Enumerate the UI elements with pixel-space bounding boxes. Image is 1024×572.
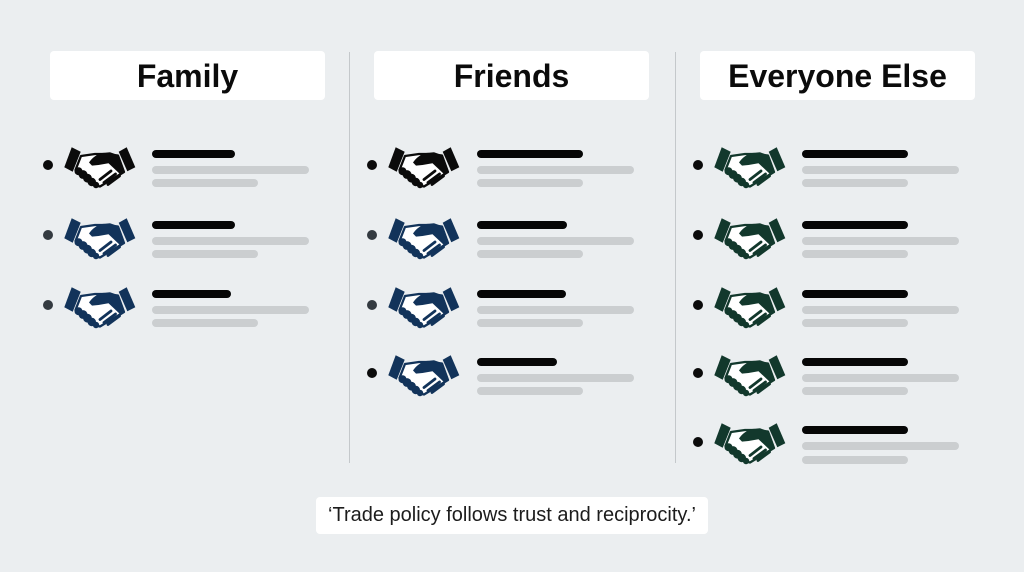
list item 1 xyxy=(367,147,634,188)
title bar xyxy=(152,221,235,229)
description line 1 xyxy=(152,166,309,174)
description line 1 xyxy=(477,374,634,382)
heading: Family: Family xyxy=(137,58,238,94)
description line 2 xyxy=(802,456,908,464)
description line 1 xyxy=(477,166,634,174)
callout: quote xyxy=(316,497,708,534)
heading: Family xyxy=(50,51,325,100)
icon: handshake xyxy=(64,147,136,188)
description line 1 xyxy=(802,306,959,314)
panel: Family xyxy=(43,51,325,328)
description line 2 xyxy=(802,179,908,187)
description line 2 xyxy=(477,250,583,258)
title bar xyxy=(802,358,908,366)
description line 2 xyxy=(152,250,258,258)
list item 5 xyxy=(693,423,959,464)
description line 2 xyxy=(477,179,583,187)
icon: handshake xyxy=(714,355,786,396)
icon: handshake xyxy=(388,218,460,260)
list item 2 xyxy=(693,218,959,260)
callout: quote: ‘Trade policy follows trust and reciprocity.’ xyxy=(328,504,696,526)
description line 2 xyxy=(802,319,908,327)
list item 2 xyxy=(43,218,309,260)
icon: handshake xyxy=(388,147,460,188)
list item 4 xyxy=(693,355,959,396)
bullet xyxy=(693,437,703,447)
title bar xyxy=(802,290,908,298)
icon: handshake xyxy=(64,218,136,260)
bullet xyxy=(693,230,703,240)
icon: handshake xyxy=(714,147,786,188)
bullet xyxy=(367,300,377,310)
list item 3 xyxy=(367,287,634,328)
description line 1 xyxy=(477,306,634,314)
icon: handshake xyxy=(714,423,786,464)
title bar xyxy=(477,221,567,229)
title bar xyxy=(477,290,566,298)
bullet xyxy=(43,300,53,310)
bullet xyxy=(693,368,703,378)
title bar xyxy=(802,221,908,229)
bullet xyxy=(367,368,377,378)
bullet xyxy=(693,160,703,170)
heading: Everyone Else xyxy=(700,51,975,100)
description line 1 xyxy=(802,374,959,382)
bullet xyxy=(367,160,377,170)
bullet xyxy=(693,300,703,310)
icon: handshake xyxy=(388,287,460,328)
title bar xyxy=(802,150,908,158)
description line 1 xyxy=(802,237,959,245)
bullet xyxy=(367,230,377,240)
bullet xyxy=(43,230,53,240)
description line 2 xyxy=(802,250,908,258)
description line 2 xyxy=(477,387,583,395)
list item 3 xyxy=(43,287,309,328)
bullet xyxy=(43,160,53,170)
list item 2 xyxy=(367,218,634,260)
heading: Friends xyxy=(374,51,649,100)
panel: Everyone Else xyxy=(693,51,975,464)
list item 4 xyxy=(367,355,634,396)
description line 1 xyxy=(802,166,959,174)
list item 3 xyxy=(693,287,959,328)
title bar xyxy=(477,150,583,158)
title bar xyxy=(152,290,231,298)
heading: Everyone Else: Everyone Else xyxy=(728,58,947,94)
title bar xyxy=(477,358,557,366)
description line 1 xyxy=(152,306,309,314)
icon: handshake xyxy=(64,287,136,328)
heading: Friends: Friends xyxy=(454,58,569,94)
description line 1 xyxy=(802,442,959,450)
title bar xyxy=(802,426,908,434)
description line 2 xyxy=(802,387,908,395)
description line 1 xyxy=(477,237,634,245)
icon: handshake xyxy=(714,287,786,328)
icon: handshake xyxy=(388,355,460,396)
list item 1 xyxy=(43,147,309,188)
panel: Friends xyxy=(367,51,649,396)
icon: handshake xyxy=(714,218,786,260)
list item 1 xyxy=(693,147,959,188)
description line 2 xyxy=(477,319,583,327)
description line 2 xyxy=(152,179,258,187)
title bar xyxy=(152,150,235,158)
description line 1 xyxy=(152,237,309,245)
description line 2 xyxy=(152,319,258,327)
